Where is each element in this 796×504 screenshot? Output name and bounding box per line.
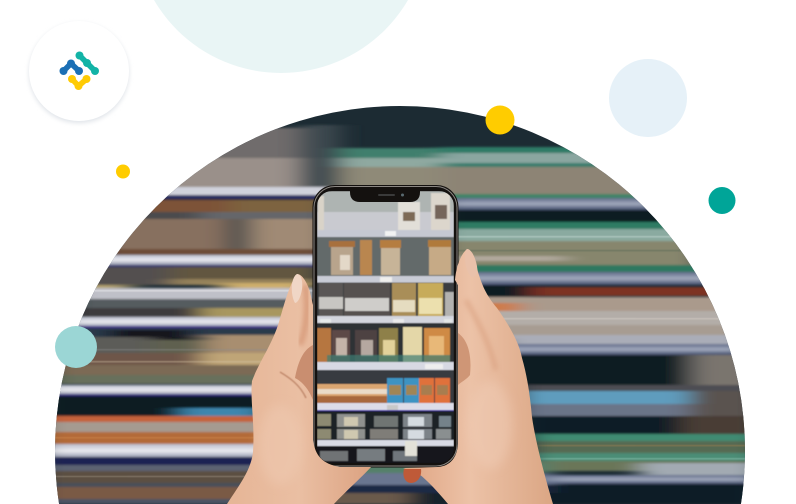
top — [216, 126, 316, 160]
logo mark: blue, teal and yellow links — [60, 52, 99, 90]
photo: blurred shelves in a circular crop — [40, 100, 760, 504]
logo badge — [29, 21, 129, 123]
decorative circle: pale blue — [609, 59, 687, 137]
pouches — [317, 323, 454, 363]
right thumbnail — [465, 249, 477, 277]
strip under the phone — [300, 462, 550, 473]
phone screen: sharp shelves — [317, 191, 454, 463]
left shelf 4 — [60, 383, 252, 396]
left thumbnail — [292, 274, 302, 303]
decorative circle: pale teal top — [134, 0, 428, 73]
fingertip nail below phone — [403, 469, 421, 483]
left hand: palm and thumb — [227, 274, 371, 504]
accent dot: teal — [708, 187, 736, 214]
left shelf 5 — [55, 442, 254, 459]
right hand: palm and thumb — [403, 249, 553, 504]
accent dot: yellow large — [486, 106, 514, 134]
phone notch — [350, 188, 420, 202]
left shelf 1 — [100, 187, 340, 195]
accent dot: light teal — [55, 326, 97, 368]
left shelf 3 — [60, 317, 340, 327]
right shelf 1 — [434, 146, 572, 152]
shelf row — [317, 230, 454, 237]
accent dot: yellow small — [116, 164, 130, 178]
trays — [317, 411, 454, 441]
cartons — [317, 370, 454, 404]
left shelf 2 — [70, 255, 340, 265]
smartphone — [312, 185, 458, 468]
bags — [317, 283, 454, 317]
